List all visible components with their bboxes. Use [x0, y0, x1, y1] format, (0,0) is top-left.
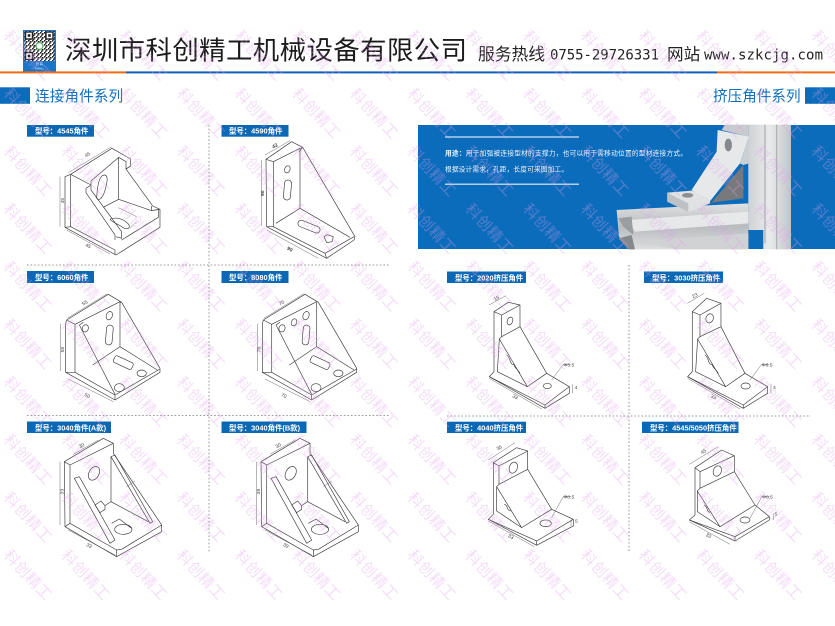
drawing: 4545/5050 extruded bracket: 45	[700, 448, 708, 456]
block: 4040 extruded bracket	[447, 422, 578, 547]
contact line: 服务热线	[478, 45, 545, 64]
label: 2020: 型号：2020挤压角件	[455, 274, 524, 282]
label: 3040 A: 型号：3040角件(A款)	[35, 424, 107, 432]
label: 4040: 型号：4040挤压角件	[455, 424, 524, 432]
drawing: 4545/5050 extruded bracket: 33	[704, 532, 712, 540]
label: 4590: 型号：4590角件	[229, 126, 283, 136]
drawing: 3040A bracket: 33	[59, 489, 65, 494]
drawing: 4040 extruded bracket: 5	[575, 519, 578, 525]
text: usage description: 根据设计需求，孔距，长度可来图加工。	[445, 164, 568, 174]
header: company banner	[0, 30, 835, 73]
drawing: 3040B bracket: 39	[256, 489, 262, 494]
drawing: 4545/5050 extruded bracket: Φ8.5	[762, 494, 773, 500]
drawing: 3030 extruded bracket	[687, 292, 776, 409]
drawing: 4040 extruded bracket: Φ8.5	[563, 495, 574, 501]
drawing: 4545/5050 extruded bracket: 5	[775, 512, 778, 518]
drawing: 4040 extruded bracket: 35	[496, 444, 504, 452]
label: 4545: 型号：4545角件	[35, 126, 89, 136]
block: 6060 bracket	[27, 271, 160, 402]
drawing: 3040B bracket	[256, 438, 358, 557]
dimension labels: 6060: 58	[60, 347, 66, 352]
drawing: 4545 bracket: 45	[60, 198, 66, 203]
drawing: 8080 bracket: 70	[280, 392, 288, 400]
drawing: 4040 extruded bracket: 33	[507, 533, 515, 541]
label: 4545/5050: 型号：4545/5050挤压角件	[650, 424, 737, 432]
contact line: 0755-29726331	[550, 48, 659, 64]
drawing: 4040 extruded bracket	[488, 443, 578, 547]
icon: QR code	[23, 30, 56, 72]
heading: left section	[0, 87, 123, 105]
drawing: 4545 bracket	[60, 147, 160, 255]
drawing: 2020 extruded bracket: 4	[575, 385, 578, 391]
drawing: 3030 extruded bracket: 33	[709, 393, 717, 401]
contact line: 网站	[667, 45, 700, 64]
block: 2020 extruded bracket	[447, 272, 578, 409]
block: 8080 bracket	[222, 271, 357, 402]
dimension labels: 6060	[60, 299, 91, 400]
drawing: 3040A bracket: 33	[85, 542, 93, 550]
label: 8080: 型号：8080角件	[229, 273, 283, 282]
icon: QR code: TMALL	[35, 66, 45, 70]
block: 3040B bracket	[222, 422, 358, 557]
panel: usage banner with photo	[418, 125, 835, 249]
drawing: 4545 bracket: 45	[84, 151, 92, 159]
drawing: 3040B bracket: 30	[275, 442, 283, 450]
text: usage description	[445, 148, 687, 174]
drawing: 2020 extruded bracket: Φ3.5	[563, 362, 574, 368]
block: 3030 extruded bracket	[644, 272, 776, 409]
drawing: 2020 extruded bracket: 33	[511, 393, 519, 401]
icon: QR code: 扫 码	[36, 61, 43, 66]
photo: corner bracket on aluminium profiles	[617, 125, 791, 249]
drawing: 4545 bracket: 45	[84, 242, 92, 250]
drawing: 4590 bracket	[260, 141, 355, 258]
company name title: 深圳市科创精工机械设备有限公司	[65, 36, 467, 66]
drawing: 3030 extruded bracket: Φ6.5	[762, 362, 773, 368]
contact line: www.szkcjg.com	[704, 48, 823, 64]
heading: right section: 挤压角件系列	[713, 88, 801, 105]
label: 6060: 型号：6060角件	[35, 273, 89, 282]
drawing: 2020 extruded bracket: 15	[493, 295, 501, 303]
label: 3030: 型号：3030挤压角件	[652, 274, 721, 282]
drawing: 8080 bracket	[257, 294, 357, 402]
drawing: 6060 bracket	[61, 294, 160, 402]
drawing: 8080 bracket: 75	[278, 299, 286, 307]
label: 3040 B: 型号：3040角件(B款)	[229, 424, 301, 432]
heading: right section	[713, 87, 835, 105]
dimension labels: 6060: 55	[81, 299, 89, 307]
heading: left section: 连接角件系列	[35, 88, 123, 105]
drawing: 3040A bracket	[59, 438, 162, 557]
contact line	[478, 45, 823, 64]
block: 4545/5050 extruded bracket	[642, 422, 778, 544]
drawing: 4590 bracket: 90	[260, 190, 266, 196]
dimension labels: 6060: 50	[83, 392, 91, 400]
drawing: 2020 extruded bracket	[489, 295, 578, 409]
block: 4590 bracket	[222, 125, 355, 258]
drawing: 4590 bracket: 90	[286, 246, 294, 254]
header rule	[0, 71, 835, 73]
block: 4545 bracket	[27, 125, 160, 255]
drawing: 8080 bracket: 78	[257, 347, 263, 352]
drawing: 3040B bracket: 39	[282, 542, 290, 550]
drawing: 4590 bracket: 42	[271, 142, 279, 150]
drawing: 3040A bracket: 30	[78, 442, 86, 450]
text: usage description: 用途：用于加强被连接型材的支撑力，也可以用于需移动位置的型材连接方式。	[445, 148, 687, 158]
drawing: 3030 extruded bracket: 4	[773, 385, 776, 391]
drawing: 3030 extruded bracket: 23	[691, 292, 699, 300]
drawing: 4545/5050 extruded bracket	[689, 447, 778, 544]
block: 3040A bracket	[27, 422, 162, 557]
